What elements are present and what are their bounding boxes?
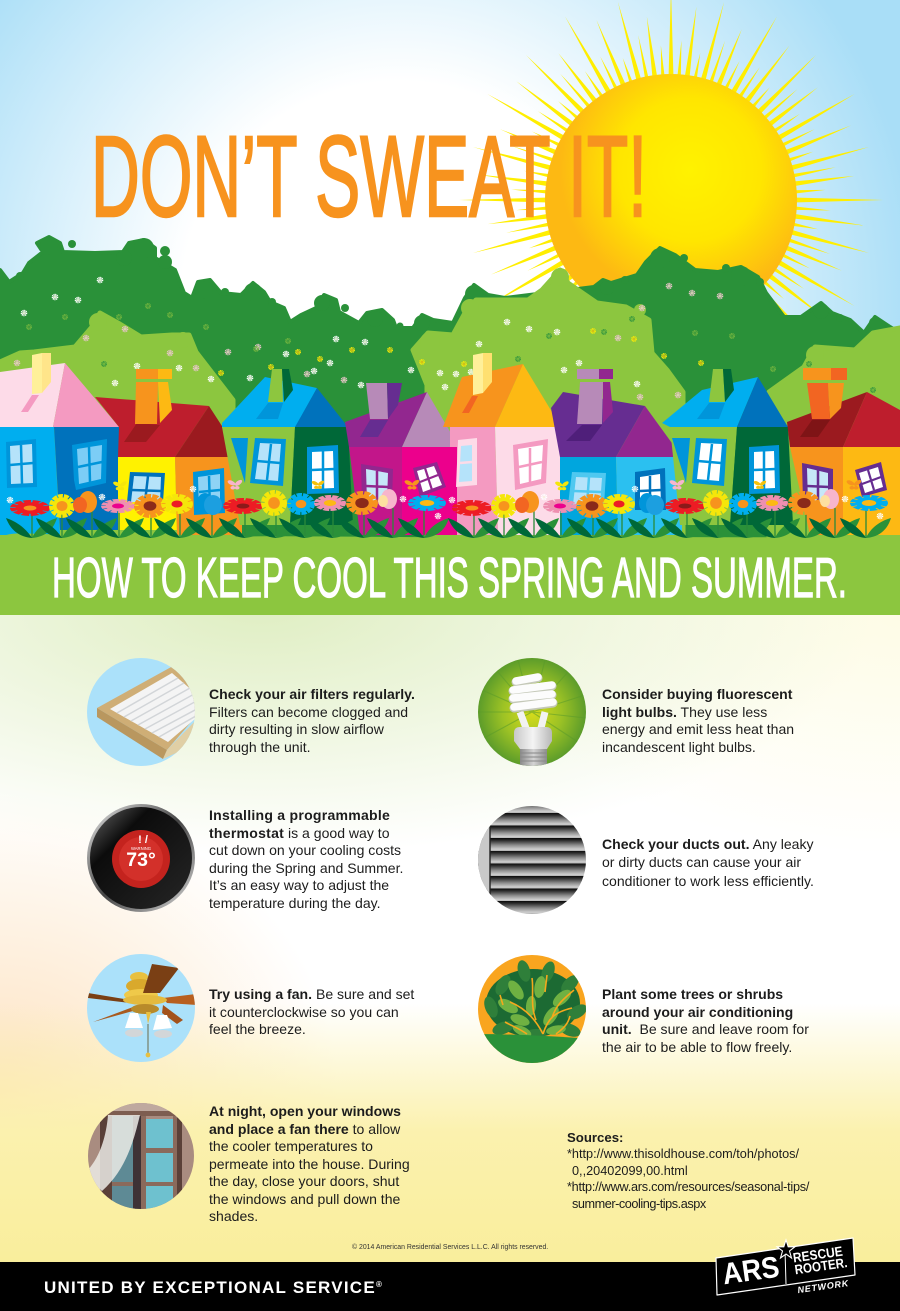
icon: programmable thermostat [87, 804, 195, 912]
tip: thermostat: thermostat is a good way to [209, 824, 390, 840]
tip: air filters: dirty resulting in slow airflow [209, 721, 384, 737]
tip: air filters: Check your air filters regularly. [209, 686, 415, 702]
sky [0, 0, 900, 560]
sources [567, 1130, 810, 1211]
house 1: pink roof, blue walls [0, 353, 119, 535]
icon: programmable thermostat: WARNING [131, 846, 151, 851]
copyright: © 2014 American Residential Services L.L.C. All rights reserved. [352, 1244, 548, 1251]
tip: thermostat: cut down on your cooling costs [209, 842, 401, 858]
icon: programmable thermostat: 73° [126, 849, 156, 871]
house 3: blue roof, green walls [222, 369, 353, 525]
house 2: red roof, yellow and orange walls [95, 369, 242, 535]
tip: night windows: the day, close your doors, shut [209, 1173, 399, 1189]
tip: ducts: conditioner to work less efficiently. [602, 873, 814, 889]
tip: light bulbs: energy and emit less heat than [602, 721, 794, 737]
icon: air filter [87, 658, 195, 766]
sources: 0,,20402099,00.html [572, 1164, 688, 1178]
icon: fluorescent light bulb [478, 658, 586, 767]
tip: thermostat [209, 807, 403, 911]
sources: summer-cooling-tips.aspx [572, 1197, 706, 1211]
sources: *http://www.ars.com/resources/seasonal-tips/ [567, 1180, 809, 1194]
icon: window with curtain [86, 1103, 196, 1212]
tip: trees and shrubs: unit. Be sure and leave room for [602, 1021, 809, 1037]
tip: trees and shrubs [602, 986, 809, 1055]
ARS Rescue Rooter logo: NETWORK [797, 1278, 850, 1295]
tip: thermostat: temperature during the day. [209, 894, 381, 910]
light green hills [0, 268, 900, 540]
house 6: purple roof, blue walls [551, 369, 682, 535]
icon: programmable thermostat: ! / [138, 834, 148, 846]
tip: night windows: permeate into the house. During [209, 1156, 410, 1172]
tip: fan: Try using a fan. Be sure and set [209, 986, 414, 1002]
tip: night windows: shades. [209, 1208, 258, 1224]
tip: night windows: At night, open your windows [209, 1103, 401, 1119]
footer band [0, 1262, 900, 1311]
tip: ducts: Check your ducts out. Any leaky [602, 836, 814, 852]
sun with rays [451, 0, 891, 420]
tip: night windows: and place a fan there to allow [209, 1120, 400, 1136]
ARS Rescue Rooter logo: ROOTER. [794, 1255, 848, 1277]
tip: light bulbs: light bulbs. They use less [602, 704, 767, 720]
tip: ducts [602, 836, 814, 889]
ARS Rescue Rooter logo: ARS [720, 1251, 781, 1291]
tip: thermostat: It’s an easy way to adjust the [209, 877, 389, 893]
tip: light bulbs: incandescent light bulbs. [602, 738, 756, 754]
tip: light bulbs [602, 686, 794, 755]
tip: light bulbs: Consider buying fluorescent [602, 686, 792, 702]
icon: shrub [478, 955, 586, 1063]
tip: air filters: through the unit. [209, 738, 311, 754]
tip: fan [209, 986, 414, 1037]
house 5: orange roof, pink walls [443, 353, 561, 535]
tip: trees and shrubs: around your air conditioning [602, 1004, 793, 1020]
ARS Rescue Rooter logo [716, 1238, 855, 1305]
tip: air filters [209, 686, 415, 755]
house 8: red roof, orange walls [787, 368, 900, 535]
green lawn band [0, 533, 900, 615]
sources: *http://www.thisoldhouse.com/toh/photos/ [567, 1147, 799, 1161]
lower tips background [0, 615, 900, 1262]
tip: thermostat: Installing a programmable [209, 807, 390, 823]
tip: air filters: Filters can become clogged and [209, 704, 408, 720]
house 4: purple roof, magenta walls [345, 383, 459, 535]
tip: thermostat: during the Spring and Summer. [209, 860, 403, 876]
flower border [6, 479, 891, 538]
small blossoms on the trees [15, 278, 875, 399]
dark green tree line [0, 237, 900, 540]
tip: fan: feel the breeze. [209, 1021, 306, 1037]
footer tagline: UNITED BY EXCEPTIONAL SERVICE® [44, 1278, 383, 1297]
tip: trees and shrubs: the air to be able to flow freely. [602, 1038, 792, 1054]
sources: Sources: [567, 1130, 623, 1145]
tip: night windows: the cooler temperatures to [209, 1138, 373, 1154]
tip: trees and shrubs: Plant some trees or shrubs [602, 986, 783, 1002]
icon: ceiling fan [87, 954, 196, 1062]
tip: night windows: the windows and pull down the [209, 1190, 400, 1206]
icon: air duct louvers [478, 806, 586, 914]
tip: fan: it counterclockwise so you can [209, 1004, 399, 1020]
tip: ducts: or dirty ducts can cause your air [602, 854, 801, 870]
house 7: blue roof, green walls [662, 369, 793, 525]
tip: night windows [209, 1103, 410, 1224]
ARS Rescue Rooter logo: RESCUE [792, 1244, 844, 1265]
